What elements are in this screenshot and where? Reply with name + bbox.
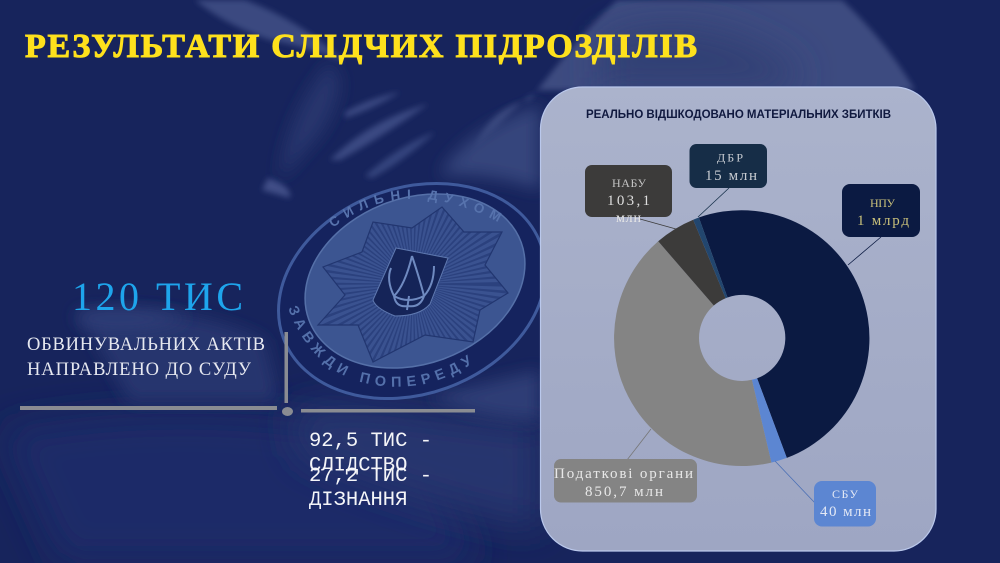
label: ДБР: 15 млн (705, 168, 757, 184)
slice: СБУ (752, 378, 787, 463)
label: Податкові органи (554, 459, 697, 502)
label: Податкові органи: Податкові органи (554, 466, 693, 482)
text block: breakdown of indictments: 92,5 ТИС - (309, 430, 432, 453)
key figure: 120 тис: 120 ТИС (72, 274, 243, 319)
label: ДБР: ДБР (717, 150, 743, 164)
chart title: РЕАЛЬНО ВІДШКОДОВАНО МАТЕРІАЛЬНИХ ЗБИТКІВ (586, 109, 891, 121)
badge: medal with trident: ЗАВЖДИ ПОПЕРЕДУ (289, 306, 469, 387)
star (318, 207, 508, 362)
label: НАБУ: НАБУ (612, 176, 646, 190)
donut chart (614, 210, 869, 466)
text block: indictments: НАПРАВЛЕНО ДО СУДУ (27, 360, 252, 380)
slice: НПУ (699, 210, 869, 458)
text block: breakdown of indictments: 27,2 ТИС - (309, 465, 432, 488)
text block: breakdown of indictments: ДІЗНАННЯ (309, 489, 407, 512)
label: СБУ: 40 млн (820, 504, 871, 520)
text block: breakdown of indictments (309, 430, 432, 512)
label: Податкові органи: 850,7 млн (585, 484, 663, 500)
slice: Податкові органи (614, 241, 771, 466)
label: НАБУ: 103,1 (607, 193, 650, 209)
text block: indictments: ОБВИНУВАЛЬНИХ АКТІВ (27, 335, 265, 355)
label: НПУ (842, 184, 920, 237)
label: НПУ: 1 млрд (857, 213, 909, 229)
panel: recovered damages (540, 87, 936, 551)
label: ДБР (690, 144, 767, 188)
label: СБУ (814, 481, 876, 526)
leader lines (627, 188, 881, 503)
connector: axis lines and node (20, 332, 475, 416)
shield with trident (373, 248, 448, 316)
label: НПУ: НПУ (870, 196, 896, 210)
label: НАБУ (585, 165, 672, 226)
title: РЕЗУЛЬТАТИ СЛІДЧИХ ПІДРОЗДІЛІВ (25, 28, 697, 65)
text block: breakdown of indictments: СЛІДСТВО (309, 454, 407, 478)
label: СБУ: СБУ (832, 487, 858, 501)
text block: indictments (27, 335, 265, 380)
badge text: СИЛЬНІ ДУХОМ (330, 190, 502, 226)
badge: medal with trident (277, 182, 540, 400)
slice: НАБУ (658, 220, 726, 306)
slice: ДБР (693, 218, 728, 298)
label: НАБУ: млн (616, 211, 642, 226)
